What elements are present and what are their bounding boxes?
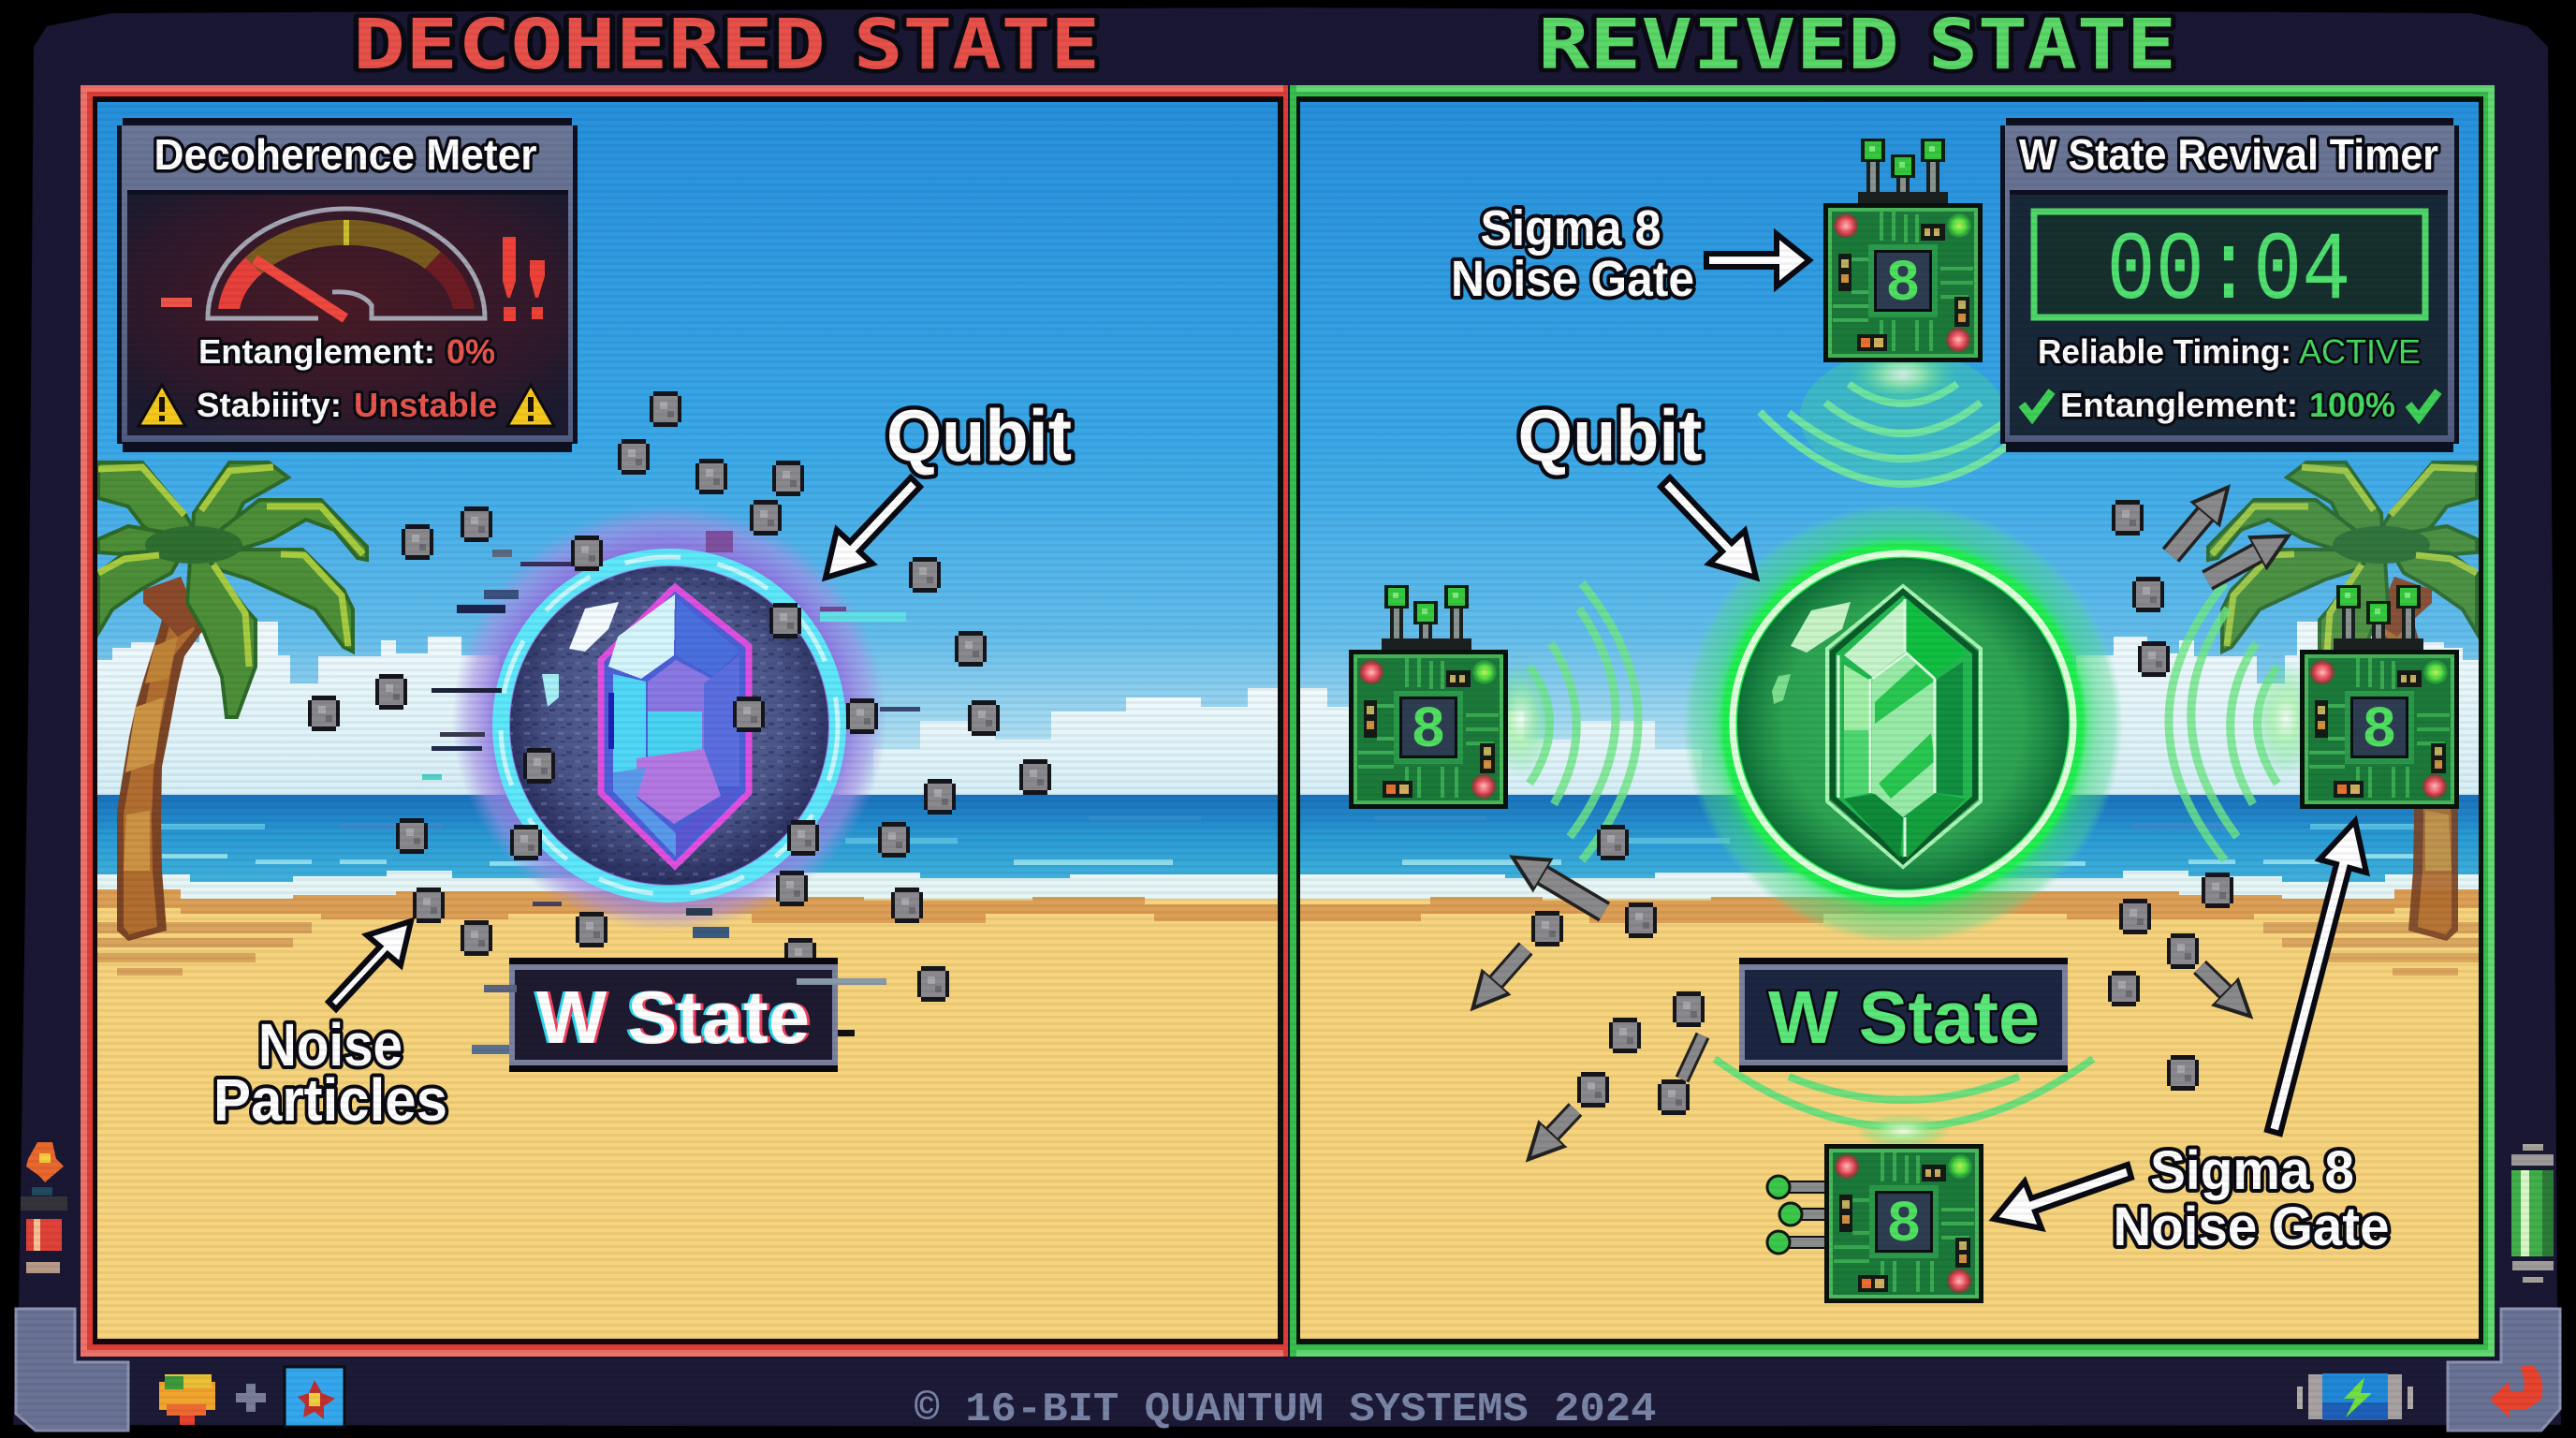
title: decohered state <box>353 5 1100 85</box>
plus sign <box>236 1384 266 1412</box>
stability readout <box>197 386 497 424</box>
arrow: qubit left <box>826 477 920 578</box>
title: decohered state: STATE <box>854 5 1100 85</box>
glitch streaks <box>422 531 920 938</box>
title: revived state <box>1538 5 2176 85</box>
icon: check right <box>2408 391 2438 418</box>
entanglement readout: Entanglement: <box>2060 386 2298 424</box>
label: w state glitched: W State <box>539 976 812 1059</box>
label: sigma 8 top <box>1451 200 1694 307</box>
label: w state glitched <box>472 958 886 1072</box>
stability readout: Stabiiity: <box>197 386 342 424</box>
sigma 8 gate: top <box>1823 139 1983 362</box>
icon: warning right <box>507 385 554 426</box>
sigma 8 gate: top: 8 <box>1885 251 1921 317</box>
right side green battery <box>2511 1144 2554 1283</box>
icon: check left <box>2022 391 2052 418</box>
decohered qubit orb <box>422 505 920 938</box>
crystal <box>601 587 749 866</box>
arrow: sigma 8 top <box>1706 234 1809 286</box>
left side red cylinder <box>21 1142 67 1273</box>
label: sigma 8 top: Noise Gate <box>1451 251 1694 307</box>
bottom bar <box>131 1359 2447 1425</box>
entanglement readout: Entanglement: <box>198 332 435 371</box>
emitter waves: right gate <box>2169 583 2320 860</box>
icon: star card <box>285 1367 344 1427</box>
sigma 8 gate: bottom <box>1767 1144 1983 1303</box>
label: noise particles: Particles <box>213 1066 447 1134</box>
label: sigma 8 bottom: Sigma 8 <box>2150 1140 2354 1201</box>
panel: revived state <box>1297 102 2479 1339</box>
label: w state revived <box>1739 958 2068 1072</box>
right corner bracket <box>2448 1309 2560 1431</box>
entanglement readout: 100% <box>2309 386 2395 424</box>
panel: decohered state <box>96 102 1278 1339</box>
arrow: qubit right <box>1661 477 1756 578</box>
reliable timing readout: ACTIVE <box>2299 332 2421 371</box>
beach background <box>96 102 1278 1339</box>
emitter waves: top gate <box>1760 346 2046 484</box>
label: w state glitched: W State <box>536 976 810 1059</box>
w state revival timer panel <box>2000 118 2459 452</box>
arrow: noise particles <box>329 921 411 1009</box>
revived qubit orb <box>1683 504 2123 944</box>
reliable timing readout <box>2038 332 2421 371</box>
label: sigma 8 top: Sigma 8 <box>1481 200 1661 257</box>
label: sigma 8 bottom: Noise Gate <box>2114 1196 2389 1257</box>
beach background <box>1297 102 2479 1339</box>
crystal <box>1827 586 1981 867</box>
gray deflected noise particles <box>1531 500 2233 1115</box>
arrow: sigma 8 to right gate <box>2267 821 2366 1134</box>
sigma 8 gate: left: 8 <box>1411 697 1446 764</box>
deflected noise arrows <box>1490 507 2265 1140</box>
gauge <box>161 209 485 318</box>
label: qubit right: Qubit <box>1518 394 1703 477</box>
title: revived state: STATE <box>1928 5 2176 85</box>
emitter waves: left gate <box>1487 583 1638 860</box>
palm tree <box>96 462 367 976</box>
title: revived state: REVIVED <box>1538 5 1899 85</box>
entanglement readout: 0% <box>446 332 495 371</box>
meter title: Decoherence Meter <box>154 130 537 179</box>
title: decohered state: DECOHERED <box>353 5 826 85</box>
entanglement readout <box>2060 386 2395 424</box>
noise particles <box>308 391 1051 1002</box>
emitter waves: bottom gate <box>1715 1059 2093 1148</box>
label: noise particles <box>213 1011 447 1134</box>
timer display: 00:04 <box>2106 217 2351 328</box>
left corner bracket <box>16 1309 128 1431</box>
sigma 8 gate: right: 8 <box>2362 697 2397 764</box>
stability readout: Unstable <box>354 386 497 424</box>
label: qubit left: Qubit <box>886 394 1072 477</box>
arrow: sigma 8 to bottom gate <box>1994 1165 2131 1228</box>
label: w state glitched: W State <box>534 976 807 1059</box>
icon: pixel brain <box>159 1374 215 1425</box>
sigma 8 gate: bottom: 8 <box>1886 1192 1922 1258</box>
palm tree <box>2208 462 2479 976</box>
footer text: © 16-BIT QUANTUM SYSTEMS 2024 <box>914 1387 1657 1433</box>
icon: warning left <box>139 385 185 426</box>
icon: battery <box>2297 1373 2413 1420</box>
reliable timing readout: Reliable Timing: <box>2038 332 2291 371</box>
label: sigma 8 bottom <box>2114 1140 2389 1257</box>
label: noise particles: Noise <box>258 1011 402 1078</box>
icon: flame <box>26 1142 64 1182</box>
label: w state revived: W State <box>1768 976 2040 1059</box>
decoherence meter panel <box>117 118 578 452</box>
timer title: W State Revival Timer <box>2019 130 2438 179</box>
sigma 8 gate: left <box>1349 585 1508 809</box>
icon: return arrow <box>2490 1365 2542 1418</box>
icon: exclamation marks <box>503 237 545 321</box>
sigma 8 gate: right <box>2300 585 2459 809</box>
